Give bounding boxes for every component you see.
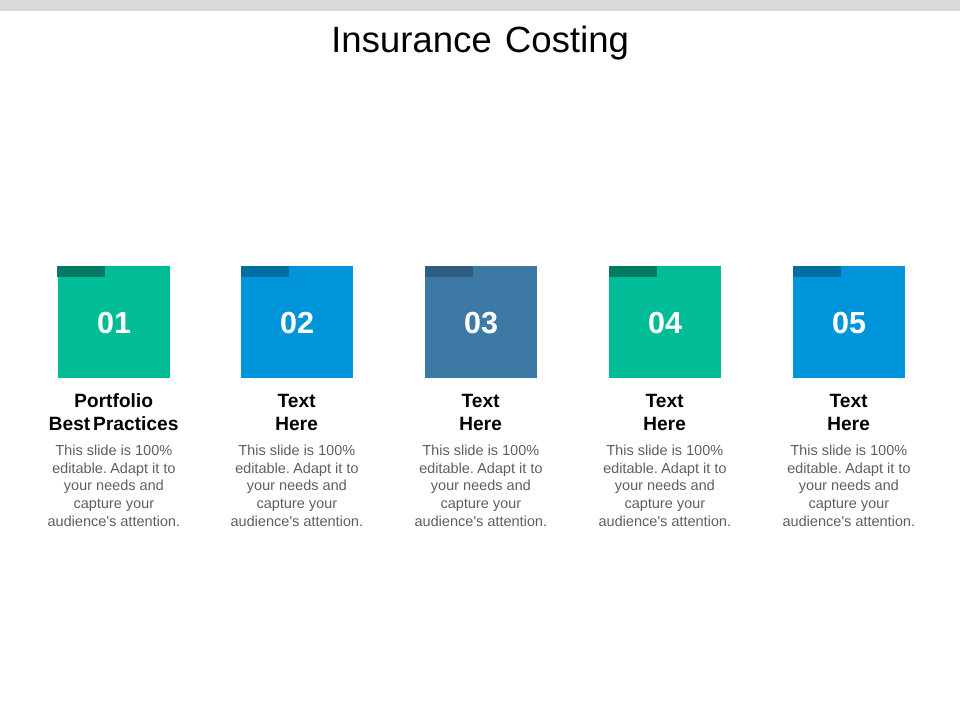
square 04 bbox=[609, 266, 721, 378]
text 01: This slide is 100% bbox=[55, 443, 172, 459]
text 03: your needs and bbox=[431, 478, 531, 494]
text 02: This slide is 100% bbox=[238, 443, 355, 459]
text 03: editable. Adapt it to bbox=[419, 461, 542, 477]
text 04: audience's attention. bbox=[598, 514, 731, 530]
heading 04 bbox=[643, 390, 686, 434]
panel: card 03 bbox=[414, 266, 547, 530]
text 02: capture your bbox=[256, 496, 337, 512]
text 01: your needs and bbox=[64, 478, 164, 494]
heading 01: Portfolio bbox=[74, 390, 153, 412]
text 04: your needs and bbox=[615, 478, 715, 494]
heading 04: Text bbox=[645, 390, 684, 412]
text 05 bbox=[782, 443, 915, 530]
text 03: capture your bbox=[440, 496, 521, 512]
text 04: capture your bbox=[624, 496, 705, 512]
heading 03: Here bbox=[459, 414, 502, 434]
text 02: audience's attention. bbox=[230, 514, 363, 530]
heading 05 bbox=[827, 390, 870, 434]
heading 03 bbox=[459, 390, 502, 434]
number 05: 05 bbox=[832, 306, 866, 340]
panel: card 05 bbox=[782, 266, 915, 530]
number 04: 04 bbox=[648, 306, 682, 340]
text 05: capture your bbox=[808, 496, 889, 512]
tab 05 bbox=[793, 266, 841, 277]
text 05: audience's attention. bbox=[782, 514, 915, 530]
text 04: This slide is 100% bbox=[606, 443, 723, 459]
text 05: editable. Adapt it to bbox=[787, 461, 910, 477]
text 05: This slide is 100% bbox=[790, 443, 907, 459]
number 02: 02 bbox=[280, 306, 314, 340]
text 01: editable. Adapt it to bbox=[52, 461, 175, 477]
top bar bbox=[0, 0, 960, 11]
text 03 bbox=[414, 443, 547, 530]
text 01: audience's attention. bbox=[47, 514, 180, 530]
heading 02 bbox=[275, 390, 318, 434]
square 01 bbox=[58, 266, 170, 378]
text 03: audience's attention. bbox=[414, 514, 547, 530]
tab 03 bbox=[425, 266, 473, 277]
text 04: editable. Adapt it to bbox=[603, 461, 726, 477]
heading 01 bbox=[49, 390, 178, 434]
panel: card 02 bbox=[230, 266, 363, 530]
tab 02 bbox=[241, 266, 289, 277]
text 05: your needs and bbox=[799, 478, 899, 494]
tab 01 bbox=[57, 266, 105, 277]
text 01: capture your bbox=[73, 496, 154, 512]
text 01 bbox=[47, 443, 180, 530]
number 03: 03 bbox=[464, 306, 498, 340]
heading 03: Text bbox=[461, 390, 500, 412]
heading 02: Here bbox=[275, 414, 318, 434]
text 02: your needs and bbox=[247, 478, 347, 494]
heading 04: Here bbox=[643, 414, 686, 434]
heading 02: Text bbox=[277, 390, 316, 412]
heading 05: Here bbox=[827, 414, 870, 434]
panel: card 04 bbox=[598, 266, 731, 530]
title: Insurance Costing bbox=[331, 19, 629, 60]
heading 05: Text bbox=[829, 390, 868, 412]
square 02 bbox=[241, 266, 353, 378]
number 01: 01 bbox=[97, 306, 131, 340]
heading 01: Best Practices bbox=[49, 414, 178, 434]
panel: card 01 bbox=[47, 266, 180, 530]
tab 04 bbox=[609, 266, 657, 277]
text 03: This slide is 100% bbox=[422, 443, 539, 459]
text 04 bbox=[598, 443, 731, 530]
text 02: editable. Adapt it to bbox=[235, 461, 358, 477]
square 05 bbox=[793, 266, 905, 378]
square 03 bbox=[425, 266, 537, 378]
text 02 bbox=[230, 443, 363, 530]
